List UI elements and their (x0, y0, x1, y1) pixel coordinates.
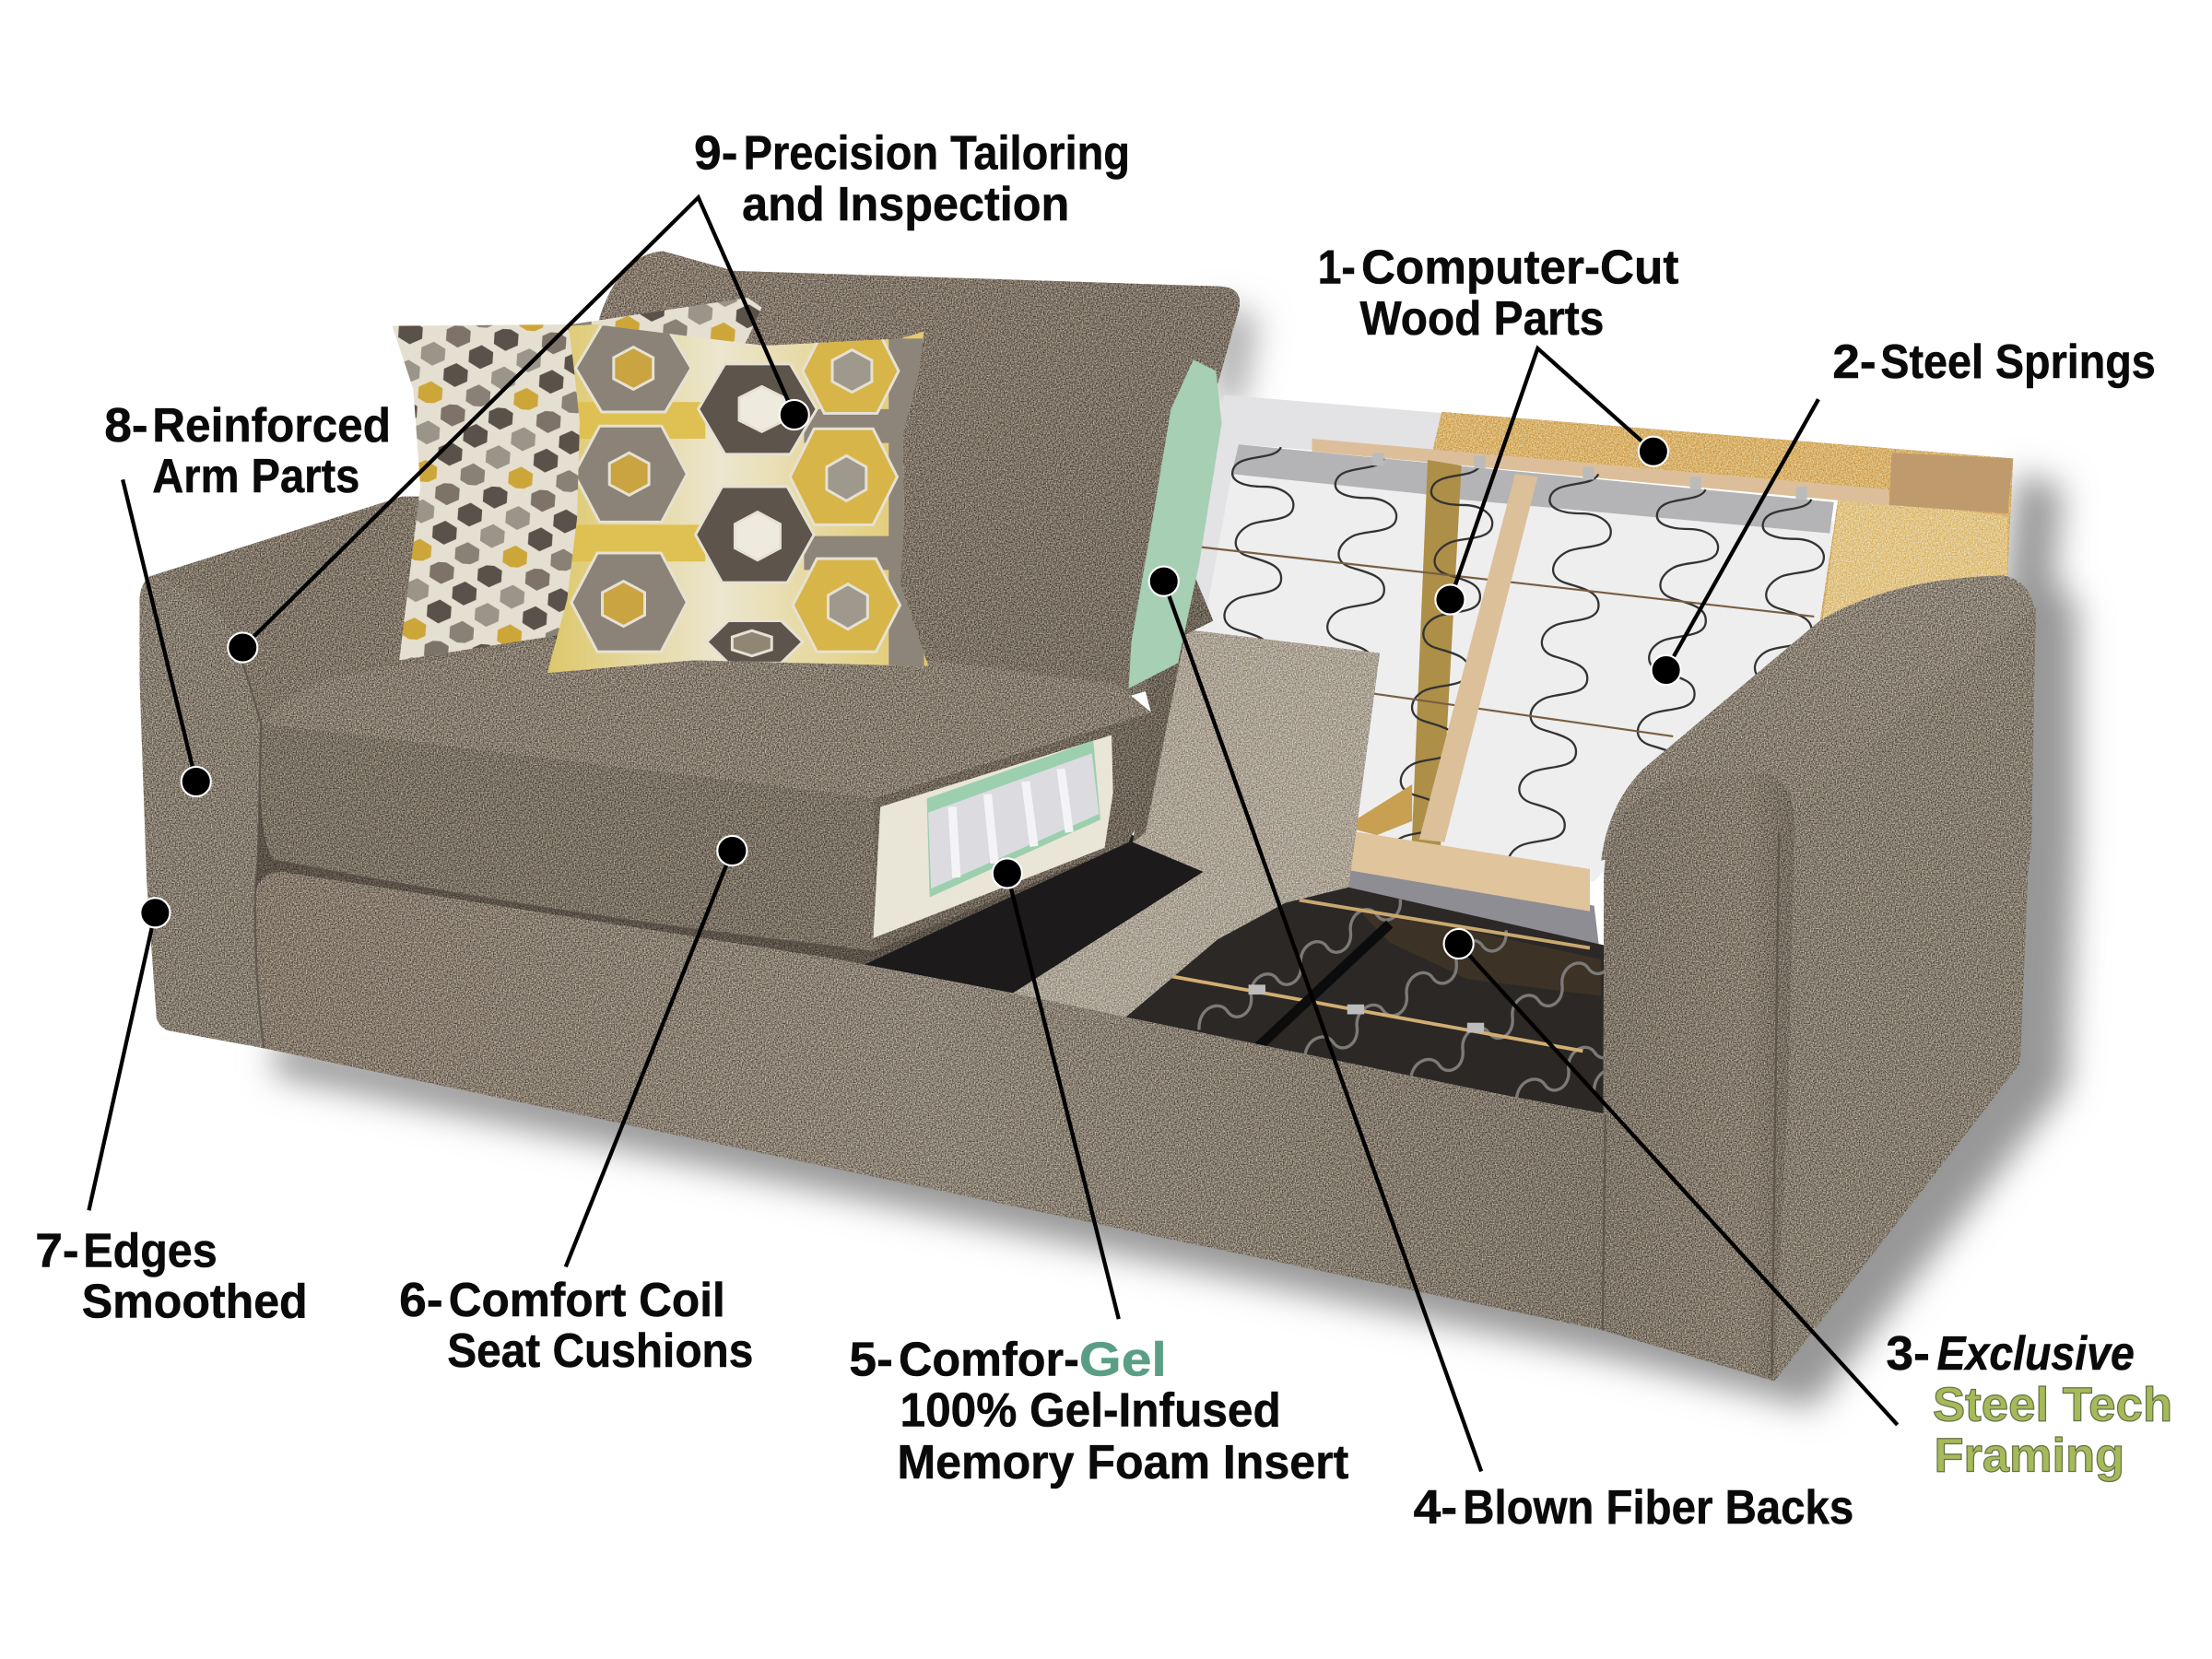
hexagon pattern (571, 324, 900, 663)
back frame with batting and wood (1182, 395, 2013, 987)
label 7: Smoothed (82, 1276, 308, 1329)
diagonal wood brace (1419, 474, 1537, 842)
green gel foam insert (1128, 359, 1222, 688)
sofa upholstery (139, 251, 2036, 1381)
coil stripes (952, 769, 1069, 877)
spring wires (1191, 447, 1824, 930)
label 4: 4- (1414, 1481, 1457, 1535)
label 8: Reinforced (152, 399, 391, 453)
left arm inside (152, 497, 558, 726)
label 3: Steel Tech (1933, 1378, 2172, 1431)
leader: 6 (566, 851, 732, 1266)
seat cushion front (260, 724, 875, 951)
seat cushion side (875, 712, 1151, 951)
back cushion (593, 251, 1240, 699)
white interior (1199, 474, 1834, 882)
dot: reinforced arm (182, 767, 211, 796)
right side panel of seat (1133, 536, 1213, 842)
grey batting strip (1231, 444, 1834, 534)
label 5 (849, 1333, 1348, 1489)
right OSB panel (1819, 494, 2007, 643)
label 9: and Inspection (742, 178, 1069, 231)
label 3 (1886, 1327, 2172, 1482)
vertical wood post (1409, 460, 1462, 903)
dot: computer-cut parts lower (1435, 584, 1465, 615)
grey felt strip (1013, 872, 1348, 1018)
label 7: Edges (83, 1224, 218, 1277)
inner hexagons (603, 347, 872, 656)
label 9: Precision Tailoring (744, 127, 1130, 181)
yellow connecting bands (571, 402, 705, 561)
label 7 (35, 1224, 308, 1329)
label 6: 6- (399, 1274, 443, 1327)
dot: steel springs (1652, 655, 1681, 685)
dot: comfor-gel (993, 858, 1022, 888)
OSB boards (1432, 412, 2013, 643)
dark spring deck (1125, 888, 1604, 1114)
seat deck (865, 630, 1604, 1113)
felt flap (1133, 629, 1380, 888)
right arm front (1603, 773, 1794, 1381)
foam shell (873, 735, 1113, 938)
left arm front (139, 575, 264, 1048)
white pocket coils (928, 753, 1099, 888)
leader: 1 (1450, 348, 1653, 600)
label 9: 9- (694, 127, 738, 181)
leader: 3 (1459, 944, 1898, 1425)
leader: 7 (88, 912, 155, 1210)
top wood rail (1312, 439, 1888, 505)
leader: 5 (1007, 873, 1119, 1319)
label 1: Wood Parts (1360, 292, 1604, 346)
white batting (1182, 395, 1446, 629)
dot: steel tech framing (1444, 929, 1474, 959)
dot: computer-cut parts upper (1639, 437, 1668, 466)
leader: 2 (1666, 399, 1818, 670)
dot: tailoring arm (228, 632, 257, 663)
label 7: 7- (35, 1224, 79, 1277)
brown fabric band at the rear of the deck (1354, 906, 1601, 996)
label 5: Memory Foam Insert (897, 1436, 1348, 1489)
leader: 8 (123, 479, 196, 782)
label 6: Seat Cushions (447, 1324, 753, 1378)
label 3: 3- (1886, 1327, 1930, 1381)
back accent pillow (393, 298, 762, 660)
front base rail (255, 872, 1608, 1330)
label 5: 100% Gel-Infused (900, 1383, 1281, 1437)
green core wrap (927, 741, 1100, 897)
lower wood rail (1342, 830, 1590, 912)
space under lower rail (1312, 864, 1604, 987)
label 9 (694, 127, 1130, 231)
black deck fabric (830, 832, 1228, 994)
label 6: Comfort Coil (449, 1274, 725, 1327)
drop shadow under the sofa (275, 303, 2077, 1408)
OSB top board (1432, 412, 2013, 641)
label 2: 2- (1832, 335, 1877, 389)
leader: 4 (1164, 582, 1481, 1471)
label 8 (104, 399, 391, 503)
right arm outer side (1775, 606, 2036, 1381)
seams (233, 635, 1779, 1375)
label 3: Exclusive (1937, 1327, 2135, 1381)
seat cushion top (261, 641, 1151, 798)
label 8: Arm Parts (152, 450, 359, 503)
label 5: Gel (1079, 1333, 1167, 1386)
right arm inner top (1601, 575, 2036, 1064)
label 1: Computer-Cut (1361, 241, 1678, 295)
leader: 9 (242, 197, 794, 648)
label 5: 5- (849, 1333, 893, 1386)
dot: edges smoothed (140, 898, 170, 927)
support bars and deck springs (1172, 899, 1604, 1098)
label 5: Comfor- (899, 1333, 1079, 1386)
label 4: Blown Fiber Backs (1463, 1481, 1853, 1535)
label 6 (399, 1274, 753, 1378)
small OSB gusset (1345, 784, 1412, 835)
front accent pillow (543, 317, 938, 678)
shadowed gaps behind cushions (248, 635, 1151, 965)
grey connecting bands (804, 338, 924, 665)
cushion cutaway with pocket coils (873, 735, 1113, 938)
label 2: Steel Springs (1880, 335, 2156, 389)
callout leader lines (88, 197, 1898, 1471)
cardboard block (1888, 453, 2013, 513)
label 1: 1- (1318, 241, 1356, 295)
dot: tailoring pillow (780, 400, 809, 429)
label 1 (1318, 241, 1678, 346)
label 3: Framing (1934, 1429, 2124, 1482)
dot: blown fiber backs (1149, 567, 1179, 596)
callout dots (140, 400, 1681, 959)
pillow body (543, 317, 938, 678)
label 8: 8- (104, 399, 148, 453)
dot: comfort coil (717, 836, 747, 865)
